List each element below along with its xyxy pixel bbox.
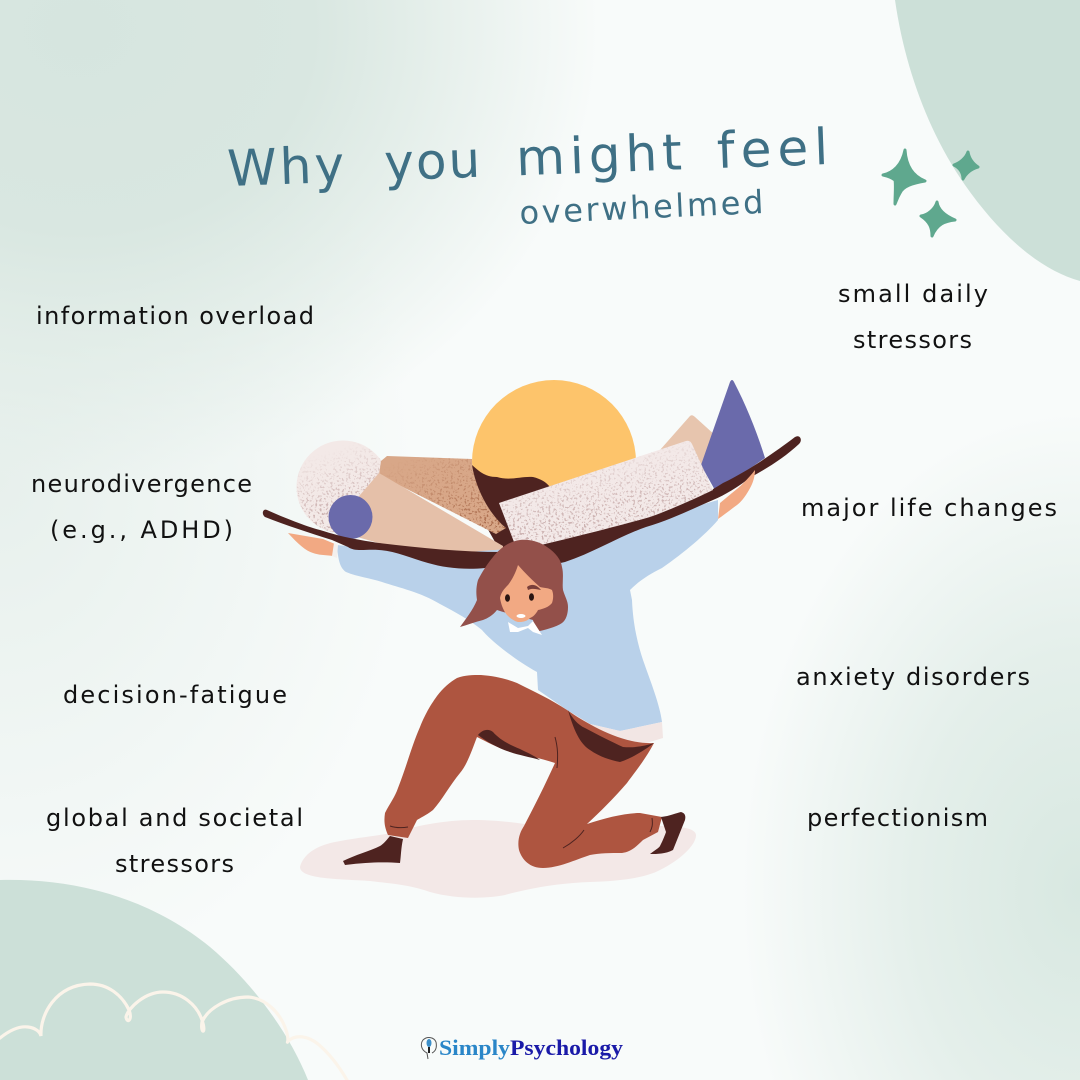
label: major life changes: major life changes [801, 494, 1057, 522]
label: small daily stressors [838, 280, 988, 354]
pale prism [499, 441, 713, 545]
dark sun shadow [472, 465, 550, 545]
corner shape: top right [895, 0, 1080, 281]
trouser crease lines [390, 737, 652, 848]
sphere speckle [296, 440, 390, 534]
red trousers [384, 675, 662, 868]
mouth [516, 614, 526, 618]
label: small daily stressors: small daily [838, 280, 988, 308]
small purple ball [328, 495, 372, 539]
textured sphere [296, 440, 390, 534]
back triangle [660, 415, 716, 475]
collar [508, 621, 542, 635]
illustration: person carrying shapes [263, 380, 801, 898]
blue sweater [337, 500, 718, 731]
label: information overload: information overload [36, 302, 314, 330]
left cuff [332, 543, 338, 558]
brown triangle speckle [379, 456, 506, 534]
dark under-prism fill [486, 508, 650, 556]
label: anxiety disorders: anxiety disorders [796, 663, 1030, 691]
tan triangle [340, 473, 503, 556]
face [500, 565, 553, 622]
dark plank [263, 436, 801, 569]
corner shape: bottom left [0, 880, 308, 1080]
label: neurodivergence: (e.g., ADHD) [50, 516, 233, 544]
right hand [718, 470, 755, 519]
title: might [515, 123, 688, 187]
icon: sparkles [883, 150, 978, 236]
title: you [383, 131, 483, 192]
eyes [505, 593, 534, 602]
label: decision-fatigue: decision-fatigue [63, 681, 287, 709]
left hand [288, 533, 335, 556]
label: neurodivergence: neurodivergence [31, 470, 252, 498]
prism speckle [499, 441, 713, 545]
title: Why [226, 136, 348, 198]
title: feel [716, 118, 835, 180]
right foot [650, 812, 685, 854]
ground shadow [300, 820, 696, 898]
brown triangle [379, 456, 506, 534]
shirt hem [567, 710, 663, 747]
decorative cloud outline [0, 984, 347, 1080]
label: global and societal stressors [46, 804, 303, 878]
knee shadow [478, 730, 540, 760]
label: small daily stressors: stressors [853, 326, 972, 354]
label: neurodivergence [31, 470, 252, 544]
left foot [343, 836, 403, 865]
eyebrow [527, 585, 541, 590]
sweater underside shadow [568, 710, 654, 762]
label: perfectionism: perfectionism [807, 804, 988, 832]
icon: head outline [421, 1038, 436, 1059]
label: global and societal stressors: global and societal [46, 804, 303, 832]
wordmark: SimplyPsychology [439, 1035, 623, 1060]
subtitle: overwhelmed [519, 183, 764, 232]
logo: SimplyPsychology [421, 1035, 623, 1060]
hair [460, 540, 568, 632]
purple triangle [701, 380, 765, 492]
label: global and societal stressors: stressors [115, 850, 234, 878]
yellow sun [472, 380, 636, 544]
